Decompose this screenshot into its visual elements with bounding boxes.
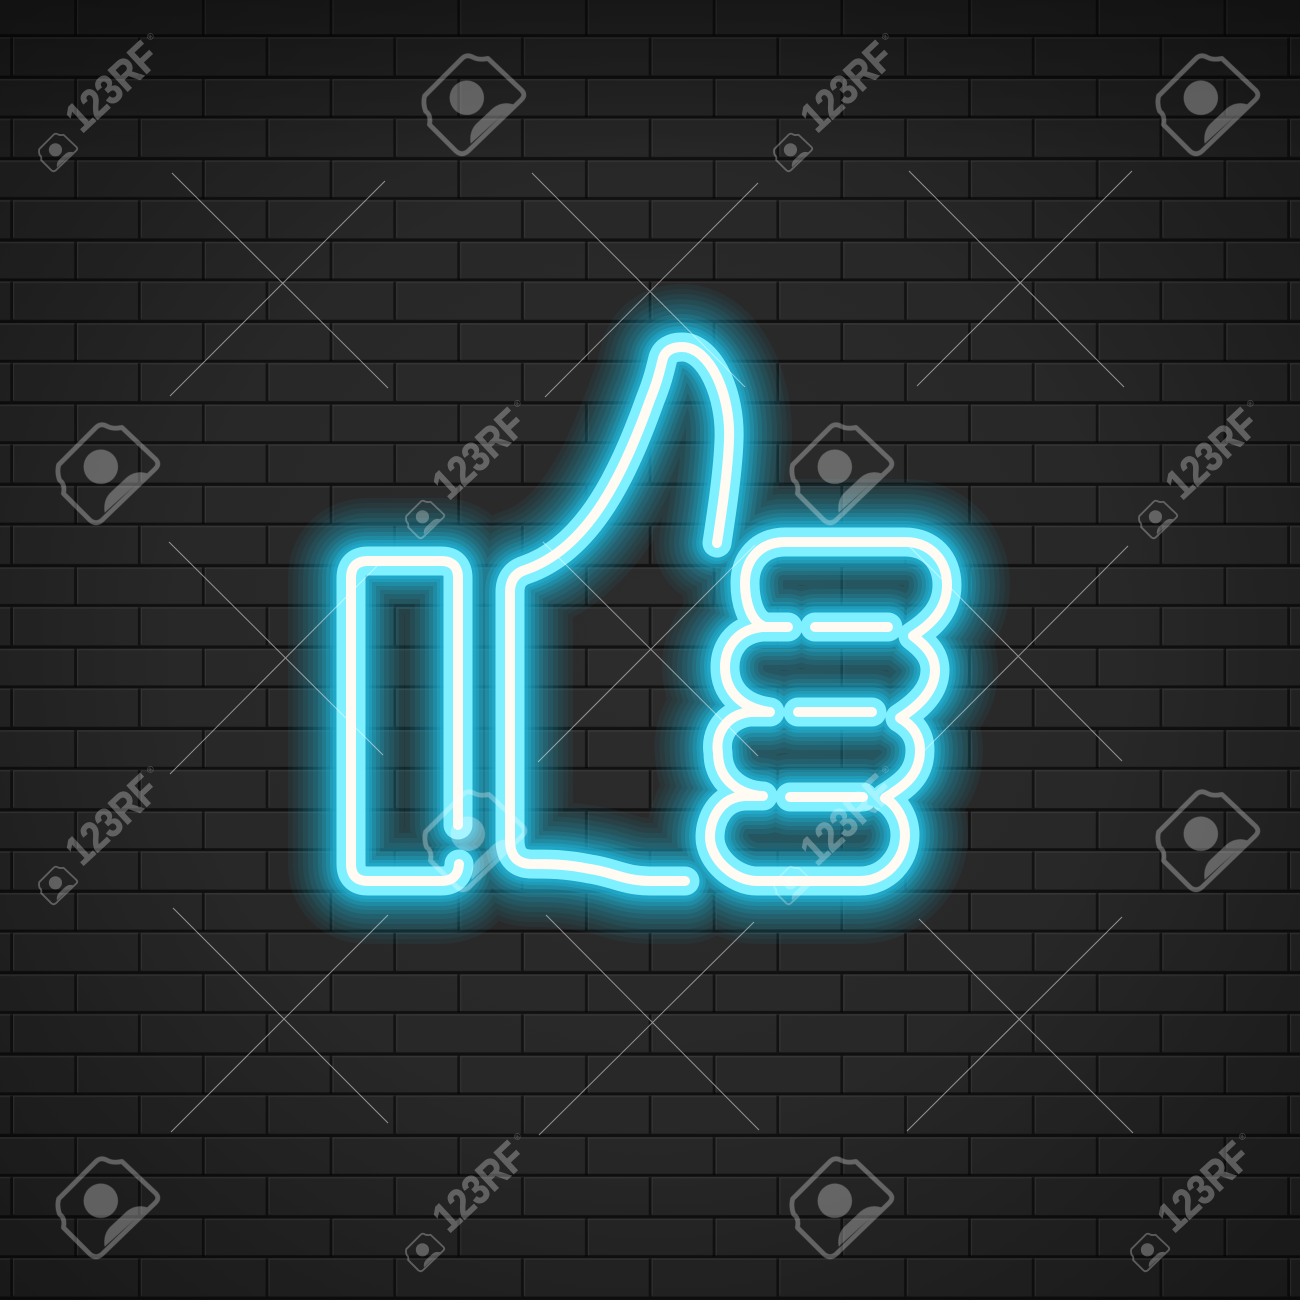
glow: layered cyan halo around the tube <box>351 347 947 881</box>
watermark: 123RF bottom-right <box>1131 1130 1259 1271</box>
watermark: 123RF lower-left: ® <box>145 763 156 775</box>
watermark: 123RF bottom-middle <box>406 1130 534 1271</box>
watermark: 123RF top-left: ® <box>145 30 156 42</box>
watermark: 123RF top-centre <box>774 30 902 171</box>
watermark: 123RF lower-left <box>39 763 167 904</box>
watermark: 123RF bottom-right: ® <box>1237 1130 1248 1142</box>
watermark: 123RF lower-centre: ® <box>880 763 891 775</box>
watermark: 123RF lower-centre <box>774 763 902 904</box>
watermark: 123RF upper-middle: ® <box>512 397 523 409</box>
watermark: 123RF upper-right: ® <box>1245 397 1256 409</box>
tube: light cyan casing <box>351 347 947 881</box>
watermark: 123RF upper-middle <box>406 397 534 538</box>
watermark: 123RF top-left: 123RF <box>56 33 167 141</box>
watermark crosses: thin diagonal lines <box>169 171 1133 1135</box>
watermark: 123RF upper-middle: 123RF <box>423 400 534 508</box>
watermark: 123RF bottom-middle: ® <box>512 1130 523 1142</box>
watermark: 123RF lower-centre: 123RF <box>791 766 902 874</box>
neon sign: thumbs up <box>351 347 947 881</box>
watermark: 123RF bottom-right: 123RF <box>1148 1133 1259 1241</box>
watermark: 123RF top-left <box>39 30 167 171</box>
watermark: 123RF lower-left: 123RF <box>56 766 167 874</box>
watermark: 123RF bottom-middle: 123RF <box>423 1133 534 1241</box>
watermark: 123RF upper-right: 123RF <box>1156 400 1267 508</box>
watermark: 123RF top-centre: ® <box>880 30 891 42</box>
watermark: 123RF top-centre: 123RF <box>791 33 902 141</box>
tube: white core <box>351 347 947 881</box>
watermark: 123RF upper-right <box>1139 397 1267 538</box>
